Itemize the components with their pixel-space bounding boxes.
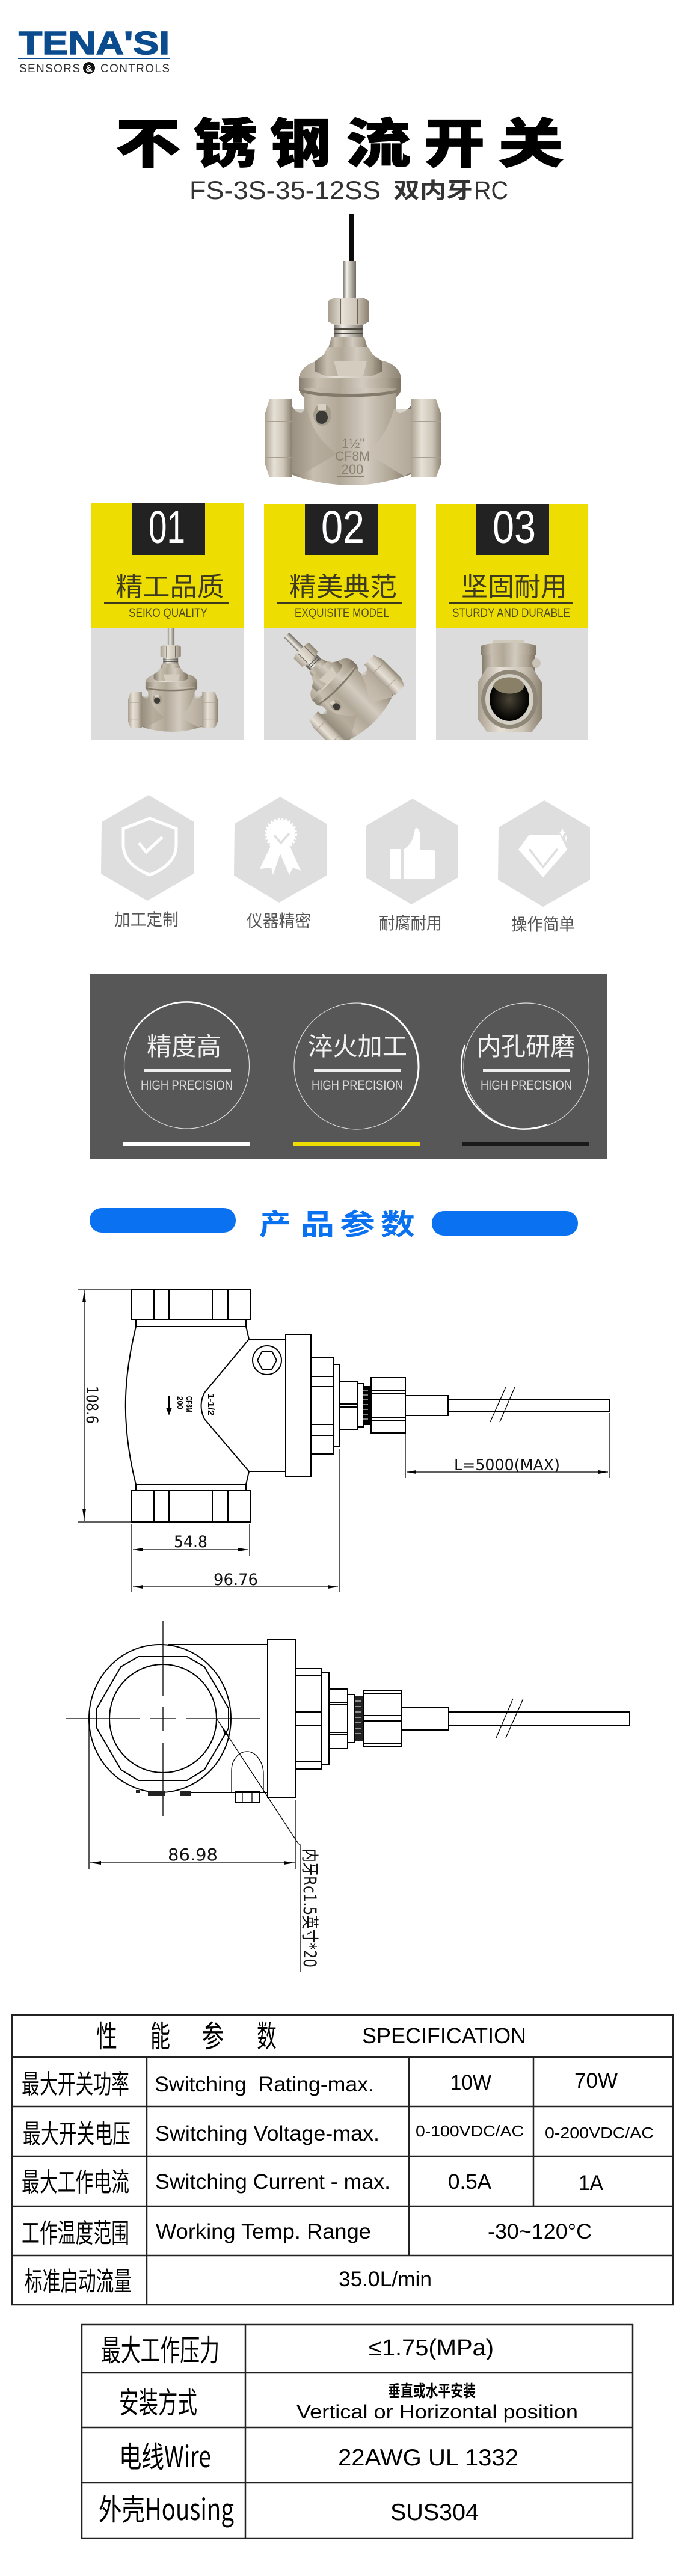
dimension: 108.6: 108.6 (82, 1386, 101, 1424)
title: 钢 (269, 102, 331, 178)
row: housing (99, 2486, 479, 2529)
logo: TENASI sensors and controls (18, 25, 170, 75)
dimension: 96.76: 96.76 (214, 1571, 258, 1589)
table header: 参 (202, 2013, 224, 2056)
icon row: four service hexagons (101, 795, 590, 936)
row: switching current: 0.5A (448, 2170, 492, 2194)
row: switching current: 最大工作电流 (22, 2160, 129, 2199)
badge: quenching: HIGH PRECISION (312, 1078, 403, 1093)
casting marks: CF8M (185, 1396, 194, 1412)
product photo: flow switch valve: CF8M (335, 449, 370, 464)
row: mounting: 垂直或水平安装 (388, 2378, 476, 2402)
body end circles (66, 1621, 268, 1816)
row: max working pressure: 最大工作压力 (101, 2327, 220, 2370)
hex plug (253, 1346, 281, 1375)
product photo: flow switch valve: 200 (342, 462, 363, 477)
row: wire (119, 2433, 518, 2476)
table header: 性 (96, 2013, 117, 2056)
row: starting flow: 标准启动流量 (25, 2260, 132, 2298)
product photo: flow switch valve: 1½" (342, 436, 364, 451)
hexagon: precise instrument (234, 797, 327, 932)
row: switching rating: 70W (574, 2069, 618, 2093)
hexagon: custom processing (101, 795, 194, 931)
technical drawing: end view (66, 1621, 630, 1972)
row: starting flow: 35.0L/min (339, 2268, 432, 2291)
row: working temperature: Working Temp. Range (156, 2220, 371, 2243)
hexagon: corrosion resistant: 耐腐耐用 (379, 910, 442, 934)
row: switching voltage: 0-100VDC/AC (416, 2122, 524, 2140)
card heading: 坚固耐用 (461, 565, 567, 604)
row: wire: 22AWG UL 1332 (338, 2445, 518, 2471)
section heading: product parameters (90, 1201, 578, 1243)
section heading: product parameters: 产 (259, 1201, 291, 1243)
panel: feature card 02 (264, 504, 416, 740)
title (115, 102, 564, 178)
row: working temperature: 工作温度范围 (22, 2212, 129, 2250)
leader and thread callout (217, 1719, 320, 1972)
row: switching rating (22, 2062, 618, 2101)
badge: bore grinding: HIGH PRECISION (481, 1078, 572, 1093)
hexagon: corrosion resistant (366, 799, 458, 934)
title: 流 (346, 102, 411, 178)
badge: bore grinding: 内孔研磨 (476, 1026, 575, 1063)
photo: valve front (128, 628, 218, 732)
title: 锈 (194, 102, 257, 178)
number badge 03 (476, 501, 549, 555)
dimension: 108.6 (78, 1289, 132, 1522)
panel: feature card 01 (91, 501, 244, 740)
section heading: product parameters: 数 (381, 1201, 415, 1243)
number badge 02 (305, 501, 378, 555)
row: switching voltage: Switching Voltage-max. (155, 2122, 379, 2145)
connector stack (286, 1334, 448, 1476)
row: switching voltage (23, 2112, 654, 2151)
badge: quenching: 淬火加工 (308, 1026, 407, 1063)
casting marks: 1-1/2 (206, 1393, 216, 1415)
number badge 01 (132, 501, 205, 555)
hexagon: simple operation (498, 800, 590, 936)
logo: TENASI sensors and controls: CONTROLS (100, 63, 170, 75)
number badge 01: 01 (149, 501, 185, 553)
table: specification (12, 2013, 673, 2305)
badge: quenching (293, 1003, 420, 1146)
row: switching voltage: 最大开关电压 (23, 2112, 131, 2151)
title: 开 (424, 102, 485, 178)
table header: SPECIFICATION (362, 2023, 526, 2048)
row: working temperature (22, 2212, 592, 2250)
connector stack (268, 1640, 449, 1797)
valve body outline (126, 1326, 286, 1485)
number badge 02: 02 (321, 501, 364, 553)
row: mounting: 安装方式 (119, 2379, 197, 2422)
table header: 数 (257, 2013, 277, 2056)
panel: dark process badges (90, 974, 607, 1159)
badge: high precision: HIGH PRECISION (141, 1078, 233, 1093)
dimension: L=5000(MAX) (405, 1413, 609, 1478)
dimension: L=5000(MAX): L=5000(MAX) (454, 1456, 560, 1474)
row: switching rating: 10W (450, 2071, 491, 2094)
row: housing: 外壳Housing (99, 2486, 234, 2529)
number badge 03: 03 (493, 501, 536, 553)
logo: TENASI sensors and controls: TENA'SI (19, 25, 170, 61)
row: housing: SUS304 (390, 2500, 479, 2525)
row: max working pressure (101, 2327, 494, 2370)
product photo: flow switch valve (265, 214, 441, 485)
row: max working pressure: ≤1.75(MPa) (369, 2335, 494, 2361)
panel: feature card 03 (436, 501, 588, 740)
technical drawing: side view (78, 1289, 609, 1592)
subtitle: model number: RC (474, 176, 508, 205)
subtitle: model number: FS-3S-35-12SS (189, 176, 381, 205)
side plug (232, 1752, 263, 1803)
cable with break (448, 1387, 609, 1422)
row: switching current (22, 2160, 604, 2199)
title: 关 (498, 102, 564, 178)
row: switching rating: 最大开关功率 (22, 2062, 129, 2101)
row: switching current: 1A (579, 2171, 604, 2195)
card subheading: EXQUISITE MODEL (295, 606, 389, 620)
row: mounting (119, 2378, 578, 2423)
hexagon: simple operation: 操作简单 (511, 912, 575, 936)
row: wire: 电线Wire (119, 2433, 211, 2476)
row: working temperature: -30~120°C (488, 2220, 592, 2243)
dimension: 54.8 (132, 1524, 250, 1592)
card heading: 精美典范 (289, 565, 397, 604)
dimension: 86.98: 86.98 (168, 1845, 218, 1865)
dimension: 86.98 (89, 1719, 296, 1869)
section heading: product parameters: 品 (301, 1201, 334, 1243)
subtitle: model number: 双内牙 (393, 173, 473, 204)
title: 不 (115, 102, 180, 178)
row: switching voltage: 0-200VDC/AC (545, 2124, 654, 2142)
card subheading: STURDY AND DURABLE (452, 606, 570, 620)
dimension: 54.8: 54.8 (174, 1533, 207, 1551)
card subheading: SEIKO QUALITY (129, 606, 207, 620)
subtitle: model number (189, 173, 508, 205)
logo: TENASI sensors and controls: SENSORS (19, 63, 80, 75)
dimension: 96.76 (133, 1449, 339, 1592)
badge: bore grinding (461, 1003, 589, 1146)
badge: high precision: 精度高 (147, 1026, 221, 1063)
card heading: 精工品质 (115, 565, 224, 604)
cable with break (449, 1699, 630, 1738)
row: switching rating: Switching Rating-max. (155, 2073, 374, 2096)
badge: high precision (123, 1002, 250, 1146)
row: mounting: Vertical or Horizontal position (296, 2401, 578, 2423)
table header: 能 (150, 2013, 170, 2056)
logo: TENASI sensors and controls: & (85, 64, 93, 74)
table: installation and materials (82, 2325, 633, 2538)
section heading: product parameters: 参 (340, 1201, 375, 1243)
leader and thread callout: 内牙Rc1.5英寸*20 (300, 1848, 320, 1967)
table header (96, 2013, 526, 2056)
hexagon: precise instrument: 仪器精密 (247, 908, 311, 932)
photo: valve end view (478, 640, 542, 732)
photo: valve angled (284, 633, 404, 740)
casting marks (166, 1393, 216, 1415)
row: starting flow (25, 2260, 432, 2298)
casting marks: 200 (176, 1396, 185, 1409)
hexagon: custom processing: 加工定制 (114, 907, 179, 931)
row: switching current: Switching Current - max. (155, 2170, 390, 2194)
